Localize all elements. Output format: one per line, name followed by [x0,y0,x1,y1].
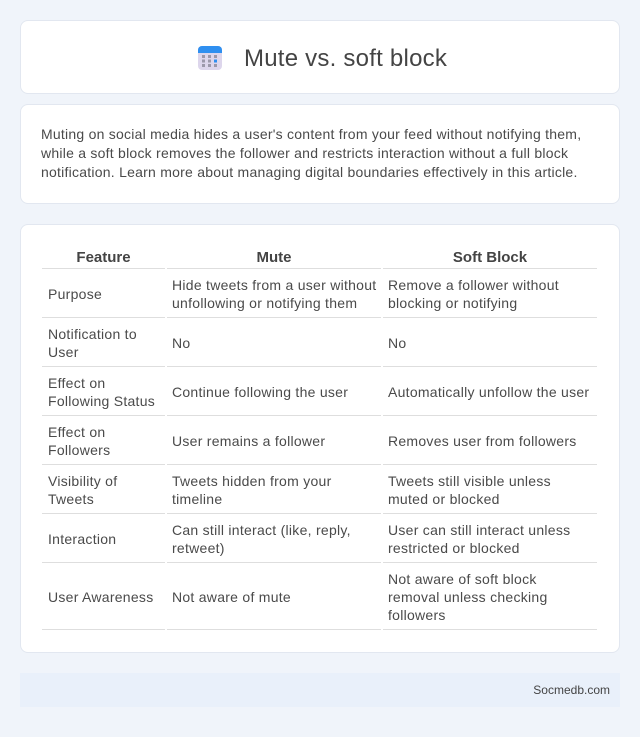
row: notification to user: Notification to [48,326,137,342]
row: visibility of tweets: Tweets hidden from your [172,473,332,489]
row: effect on followers: Followers [48,442,110,458]
row: purpose: Remove a follower without [388,277,559,293]
text block: description: notification. Learn more about managing digital boundaries effectively in this article. [41,164,578,180]
row: notification to user: No [172,335,190,351]
footer bar [20,673,620,707]
row: interaction: restricted or blocked [388,540,520,556]
panel: comparison table [20,224,620,653]
row: purpose: Purpose [48,286,102,302]
row: effect on following status: Effect on [48,375,105,391]
row: effect on followers: User remains a follower [172,433,325,449]
table header: Feature [76,249,131,266]
row: effect on following status [42,375,597,416]
row: user awareness: Not aware of mute [172,589,291,605]
panel: description [20,104,620,204]
row: interaction: User can still interact unless [388,522,570,538]
row: notification to user: No [388,335,406,351]
row: visibility of tweets: timeline [172,491,222,507]
footer credit: Socmedb.com [533,683,610,697]
icon: calendar [198,46,222,70]
row: purpose: unfollowing or notifying them [172,295,357,311]
row: effect on following status: Automatically unfollow the user [388,384,589,400]
row: user awareness: User Awareness [48,589,153,605]
row: visibility of tweets: muted or blocked [388,491,500,507]
row: effect on followers: Effect on [48,424,105,440]
title: Mute vs. soft block [244,45,447,72]
text block: description [41,126,581,180]
panel: title card [20,20,620,94]
row: purpose: Hide tweets from a user without [172,277,376,293]
table header: Soft Block [453,249,527,266]
row: effect on following status: Following Status [48,393,155,409]
row: visibility of tweets: Tweets [48,491,94,507]
row: visibility of tweets: Visibility of [48,473,117,489]
row: user awareness: followers [388,607,446,623]
text block: description: Muting on social media hides a user's content from your feed without notifying them, [41,126,581,142]
table header: Mute [256,249,292,266]
table header [42,249,597,269]
row: purpose: blocking or notifying [388,295,517,311]
row: user awareness: removal unless checking [388,589,548,605]
row: effect on following status: Continue following the user [172,384,348,400]
row: interaction: Interaction [48,531,116,547]
row: visibility of tweets: Tweets still visible unless [388,473,551,489]
row: purpose [42,277,597,318]
row: notification to user: User [48,344,79,360]
row: interaction [42,522,597,563]
row: user awareness: Not aware of soft block [388,571,537,587]
text block: description: while a soft block removes the follower and restricts interaction without a full block [41,145,568,161]
row: effect on followers [42,424,597,465]
row: notification to user [42,326,597,367]
row: interaction: Can still interact (like, reply, [172,522,351,538]
row: visibility of tweets [42,473,597,514]
row: effect on followers: Removes user from followers [388,433,577,449]
row: interaction: retweet) [172,540,225,556]
